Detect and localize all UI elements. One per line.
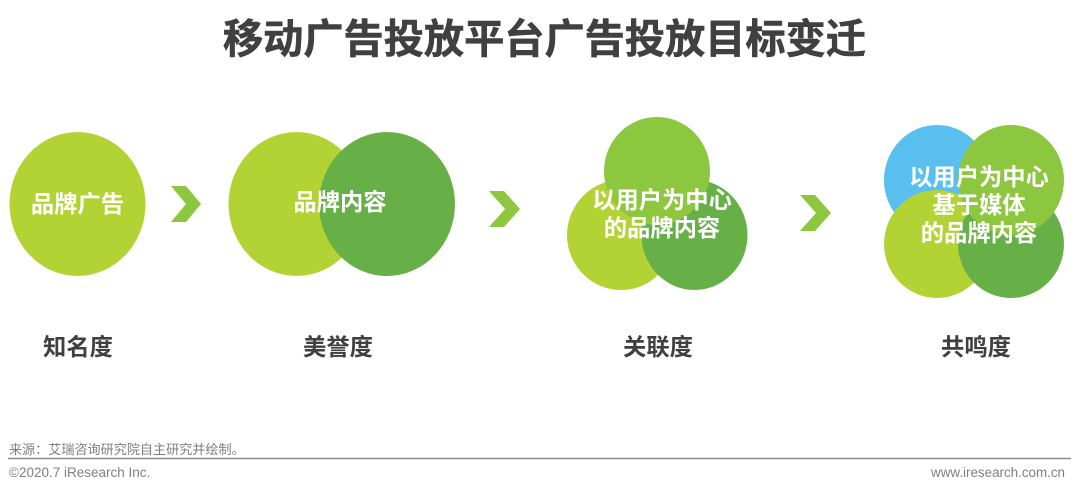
title: 移动广告投放平台广告投放目标变迁 bbox=[223, 17, 866, 62]
arrow 2 bbox=[489, 191, 520, 227]
copyright: ©2020.7 iResearch Inc. bbox=[9, 465, 150, 480]
stage 4: media-based circles: 以用户为中心 bbox=[909, 164, 1049, 190]
stage 3: user-centred circles bbox=[567, 117, 748, 290]
stage 4: media-based circles: 基于媒体 bbox=[932, 192, 1026, 218]
stage 1: brand advertising circle bbox=[10, 132, 146, 276]
label: awareness: 知名度 bbox=[43, 334, 113, 360]
source note: 来源：艾瑞咨询研究院自主研究并绘制。 bbox=[9, 442, 245, 457]
label: reputation: 美誉度 bbox=[303, 334, 373, 360]
stage 3: user-centred circles: 的品牌内容 bbox=[604, 215, 720, 241]
website: www.iresearch.com.cn bbox=[930, 465, 1065, 480]
arrow 3 bbox=[800, 195, 831, 231]
arrow 1 bbox=[171, 186, 201, 222]
label: resonance: 共鸣度 bbox=[941, 334, 1011, 360]
label: relevance: 关联度 bbox=[623, 334, 693, 360]
stage 2: brand content circles: 品牌内容 bbox=[293, 189, 387, 215]
stage 4: media-based circles: 的品牌内容 bbox=[921, 220, 1037, 246]
stage 3: user-centred circles: 以用户为中心 bbox=[592, 187, 732, 213]
stage 2: brand content circles bbox=[228, 132, 455, 276]
stage 4: media-based circles bbox=[884, 125, 1064, 298]
stage 1: brand advertising circle: 品牌广告 bbox=[31, 191, 124, 217]
